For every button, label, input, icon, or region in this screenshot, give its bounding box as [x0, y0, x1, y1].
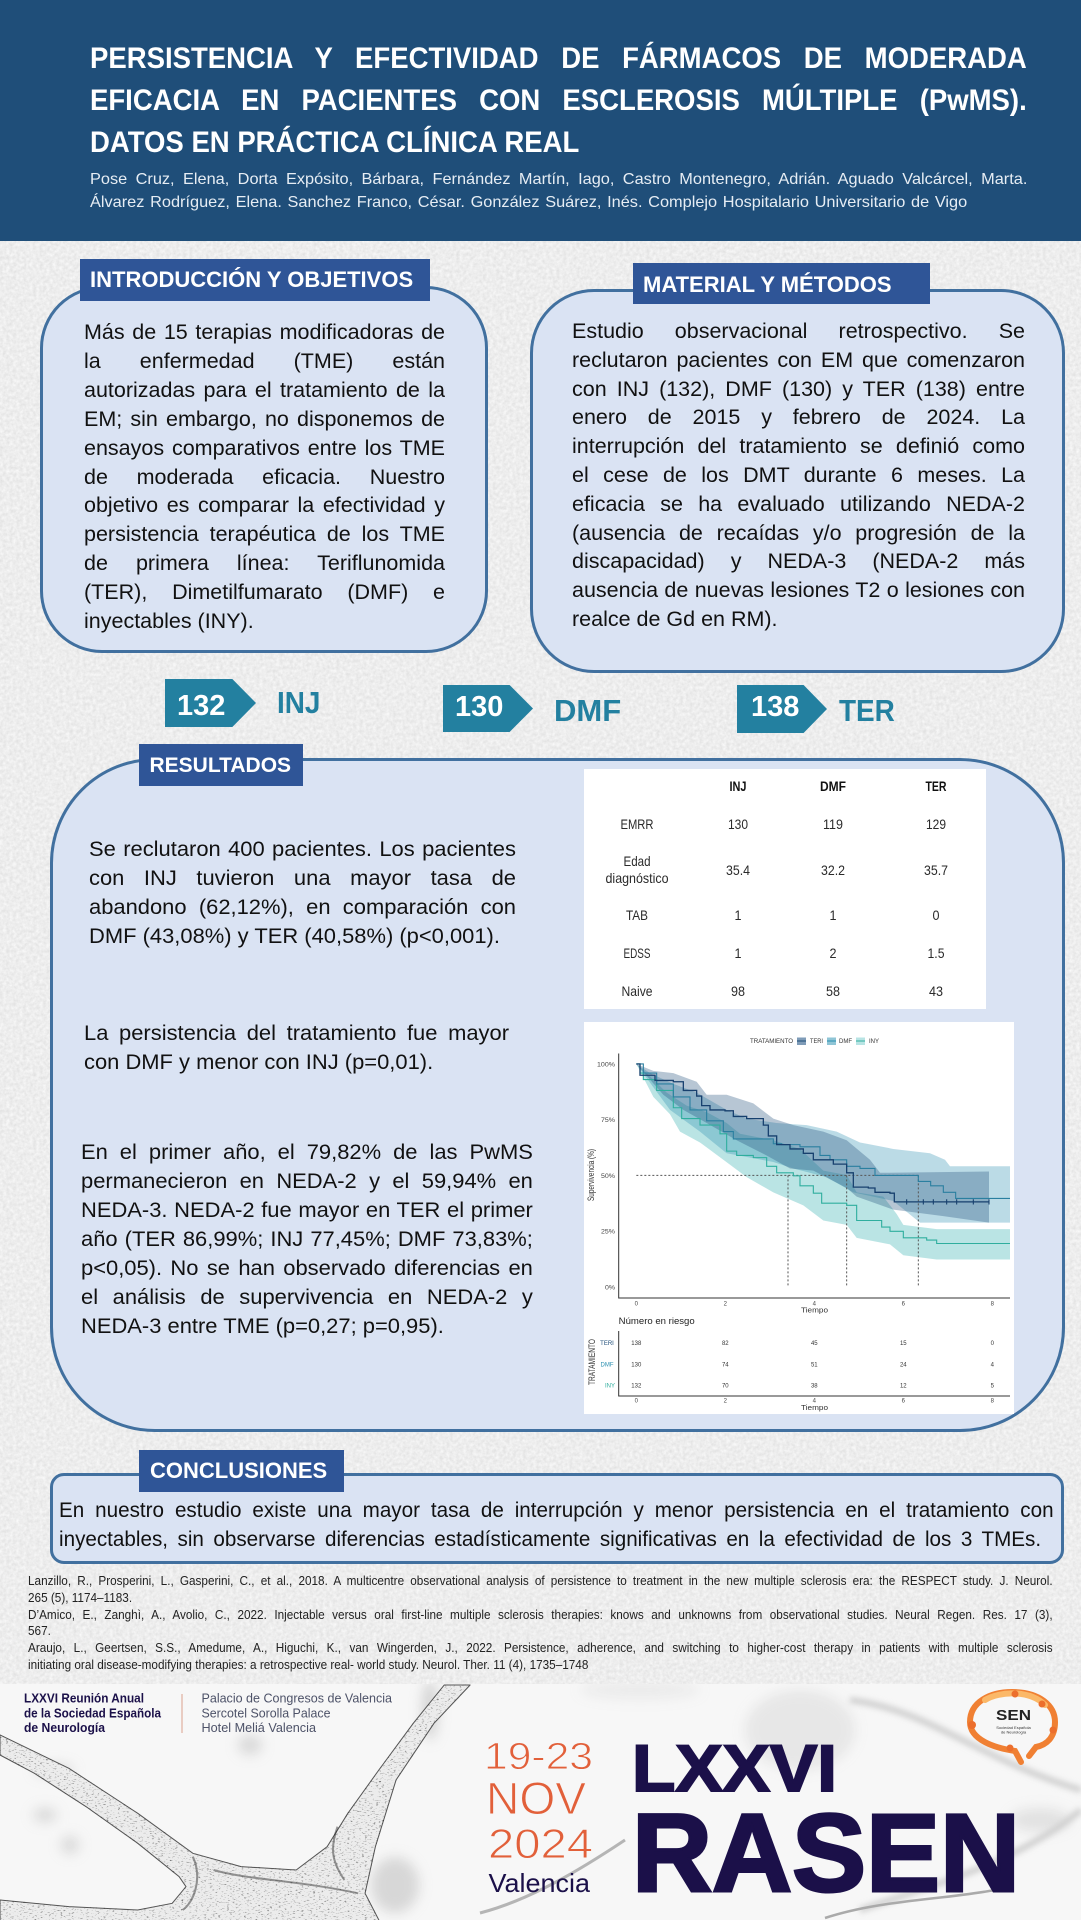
- text: introducción: (TER), Dimetilfumarato (DMF) e: [84, 580, 445, 604]
- table: características basales: 2: [830, 945, 837, 961]
- table: características basales: Naive: [622, 983, 653, 999]
- text: NEDA: p<0,05). No se han observado diferencias en: [81, 1256, 533, 1280]
- title: DATOS EN PRÁCTICA CLÍNICA REAL: [90, 126, 579, 159]
- table: características basales: EDSS: [624, 945, 650, 961]
- references: 265 (5), 1174–1183.: [28, 1591, 132, 1605]
- chart axis labels: 25%: [601, 1230, 616, 1236]
- chart: Kaplan-Meier survival: [584, 1022, 1014, 1414]
- chart axis labels: [597, 1062, 995, 1405]
- risk table: [600, 1316, 995, 1390]
- chart legend: DMF: [839, 1039, 852, 1045]
- table: características basales: 58: [826, 983, 840, 999]
- text: persistencia: La persistencia del tratamiento fue mayor: [84, 1021, 509, 1045]
- risk table: INY: [605, 1384, 615, 1390]
- risk table: TERI: [600, 1341, 614, 1347]
- text: abandono: Se reclutaron 400 pacientes. Los pacientes: [89, 836, 516, 860]
- chart: Kaplan-Meier survival: TRATAMIENTO: [587, 1339, 597, 1385]
- chart axis labels: 100%: [597, 1062, 616, 1068]
- panel: conclusiones: [50, 1450, 1064, 1564]
- title: [90, 42, 1027, 159]
- text: abandono: DMF (43,08%) y TER (40,58%) (p<0,001).: [89, 924, 500, 948]
- text: métodos: discapacidad) y NEDA-3 (NEDA-2 más: [572, 549, 1025, 573]
- heading: conclusiones: CONCLUSIONES: [150, 1458, 327, 1483]
- table: características basales: TER: [926, 778, 946, 794]
- text: persistencia: [84, 1021, 509, 1074]
- text: introducción: Más de 15 terapias modificadoras de: [84, 320, 445, 344]
- text: métodos: ausencia de nuevas lesiones T2 o lesiones con: [572, 578, 1025, 602]
- icon: SEN logo: Sociedad Española: [996, 1725, 1032, 1730]
- text: NEDA: año (TER 86,99%; INJ 77,45%; DMF 73,83%;: [81, 1226, 533, 1250]
- panel: introducción y objetivos: [40, 259, 488, 653]
- references: Lanzillo, R., Prosperini, L., Gasperini, C., et al., 2018. A multicentre observational analysis of persistence to treatment in the new multiple sclerosis era: the RESPECT study. J. Neurol.: [28, 1574, 1053, 1588]
- dates: [484, 1736, 593, 1898]
- references: D’Amico, E., Zanghì, A., Avolio, C., 2022. Injectable versus oral first-line multiple sclerosis therapies: knows and unknowns from observational studies. Neural Regen. Res. 17 (3),: [28, 1608, 1053, 1622]
- authors: Pose Cruz, Elena, Dorta Expósito, Bárbara, Fernández Martín, Iago, Castro Montenegro, Adrián. Aguado Valcárcel, Marta.: [90, 170, 1027, 188]
- survival curves: [636, 1064, 1010, 1287]
- table: características basales: 32.2: [821, 862, 845, 878]
- text: introducción: ensayos comparativos entre los TME: [84, 436, 445, 460]
- references: 567.: [28, 1624, 51, 1638]
- heading: conclusiones: [139, 1450, 344, 1492]
- dates: 19-23: [484, 1736, 593, 1778]
- text: métodos: reclutaron pacientes con EM que comenzaron: [572, 348, 1025, 372]
- table: características basales: 0: [932, 907, 940, 923]
- risk table: 15: [900, 1341, 907, 1347]
- table: características basales: DMF: [820, 778, 846, 794]
- text: métodos: eficacia se ha evaluado utilizando NEDA-2: [572, 492, 1025, 516]
- arrow: 138: [737, 685, 827, 733]
- title: EFICACIA EN PACIENTES CON ESCLEROSIS MÚLTIPLE (PwMS).: [90, 84, 1027, 117]
- chart legend: INY: [869, 1039, 879, 1045]
- text: introducción: la enfermedad (TME) están: [84, 349, 445, 373]
- table: características basales: diagnóstico: [606, 870, 669, 886]
- table: características basales: 98: [731, 983, 745, 999]
- heading: material y métodos: [633, 263, 930, 304]
- references: Araujo, L., Geertsen, S.S., Amedume, A., Higuchi, K., van Wingerden, J., 2022. Persistence, adherence, and switching to higher-cost therapy in patients with multiple sclerosis: [28, 1641, 1053, 1655]
- table: características basales: 130: [728, 816, 748, 832]
- text: abandono: [89, 836, 516, 948]
- congress name: RASEN: [632, 1792, 1020, 1915]
- dates: 2024: [488, 1820, 593, 1867]
- chart axis labels: 4: [813, 1399, 817, 1405]
- chart axis labels: 0: [635, 1399, 639, 1405]
- text: NEDA: [81, 1140, 533, 1338]
- arrow: 132: 132: [177, 690, 225, 722]
- risk table: 45: [811, 1341, 818, 1347]
- text: introducción: autorizadas para el tratamiento de la: [84, 378, 445, 402]
- congress name: LXXVI: [632, 1731, 837, 1805]
- risk table: 132: [631, 1384, 642, 1390]
- heading: resultados: [139, 744, 303, 786]
- panel: resultados: [50, 744, 1065, 1432]
- congress info: Sercotel Sorolla Palace: [202, 1706, 331, 1720]
- table: características basales: TAB: [626, 907, 648, 923]
- risk table: 38: [811, 1384, 818, 1390]
- chart axis labels: 2: [724, 1302, 728, 1308]
- text: NEDA: En el primer año, el 79,82% de las PwMS: [81, 1140, 533, 1164]
- chart axis labels: 6: [902, 1399, 906, 1405]
- table: características basales: 1: [830, 907, 837, 923]
- dates: Valencia: [488, 1868, 591, 1898]
- neuron: [0, 1685, 470, 1920]
- congress info: LXXVI Reunión Anual: [24, 1692, 144, 1706]
- text: introducción: persistencia terapéutica de los TME: [84, 522, 445, 546]
- risk table: 12: [900, 1384, 907, 1390]
- header banner: [0, 0, 1081, 241]
- heading: introducción y objetivos: INTRODUCCIÓN Y OBJETIVOS: [90, 267, 413, 292]
- table: características basales: 35.4: [726, 862, 750, 878]
- table: características basales: EMRR: [620, 816, 654, 832]
- text: métodos: Estudio observacional retrospectivo. Se: [572, 319, 1025, 343]
- chart: Kaplan-Meier survival: Tiempo: [801, 1403, 828, 1412]
- chart: Kaplan-Meier survival: Supervivencia (%): [586, 1149, 596, 1201]
- chart axis labels: 8: [991, 1399, 995, 1405]
- text: persistencia: con DMF y menor con INJ (p=0,01).: [84, 1050, 433, 1074]
- icon: SEN logo: de Neurología: [1001, 1730, 1027, 1734]
- table: características basales: 43: [929, 983, 943, 999]
- text: conclusiones: En nuestro estudio existe una mayor tasa de interrupción y menor persistencia en el tratamiento con: [59, 1498, 1053, 1522]
- label: DMF: DMF: [554, 693, 621, 728]
- table: características basales: Edad: [624, 853, 650, 869]
- label: INJ: INJ: [277, 685, 320, 720]
- text: abandono: con INJ tuvieron una mayor tasa de: [89, 866, 516, 890]
- chart axis labels: 75%: [601, 1118, 616, 1124]
- risk table: 130: [631, 1362, 642, 1368]
- text: introducción: objetivo es comparar la efectividad y: [84, 493, 445, 517]
- chart axis labels: 6: [902, 1302, 906, 1308]
- arrow: 132: [165, 679, 256, 727]
- risk table: 0: [991, 1341, 995, 1347]
- risk table: 82: [722, 1341, 729, 1347]
- table: características basales: 129: [926, 816, 946, 832]
- congress name: [632, 1731, 1020, 1915]
- risk table: 138: [631, 1341, 642, 1347]
- chart axis labels: 50%: [601, 1174, 616, 1180]
- text: NEDA: el análisis de supervivencia en NEDA-2 y: [81, 1284, 533, 1308]
- risk table: Número en riesgo: [619, 1316, 695, 1326]
- references: [28, 1574, 1053, 1672]
- chart axis labels: 2: [724, 1399, 728, 1405]
- risk table: 4: [991, 1362, 995, 1368]
- chart axis labels: 4: [813, 1302, 817, 1308]
- panel: material y métodos: [530, 263, 1065, 673]
- table: características basales: [584, 769, 986, 1009]
- text: introducción: de moderada eficacia. Nuestro: [84, 465, 445, 489]
- text: NEDA: NEDA-3 entre TME (p=0,27; p=0,95).: [81, 1314, 444, 1338]
- title: PERSISTENCIA Y EFECTIVIDAD DE FÁRMACOS DE MODERADA: [90, 42, 1027, 75]
- table: características basales: 1: [734, 945, 742, 961]
- table: características basales: INJ: [730, 778, 746, 794]
- text: introducción: de primera línea: Teriflunomida: [84, 551, 445, 575]
- risk table: 51: [811, 1362, 818, 1368]
- text: introducción: inyectables (INY).: [84, 609, 254, 633]
- arrow: 138: 138: [751, 691, 799, 723]
- text: abandono: abandono (62,12%), en comparación con: [89, 894, 516, 918]
- congress banner: [0, 1684, 1081, 1920]
- table: características basales: 1: [734, 907, 742, 923]
- faint axon lines: [480, 1840, 625, 1913]
- authors: Álvarez Rodríguez, Elena. Sanchez Franco, César. González Suárez, Inés. Complejo Hospitalario Universitario de Vigo: [90, 194, 967, 211]
- congress info: de la Sociedad Española: [24, 1706, 162, 1720]
- chart axis labels: 0: [635, 1302, 639, 1308]
- table: características basales: 119: [823, 816, 843, 832]
- arrow: 130: [443, 685, 533, 732]
- text: introducción: EM; sin embargo, no disponemos de: [84, 407, 445, 431]
- chart axis labels: 8: [991, 1302, 995, 1308]
- text: métodos: (ausencia de recaídas y/o progresión de la: [572, 521, 1025, 545]
- text: métodos: [572, 319, 1025, 631]
- arrow: 130: 130: [455, 691, 503, 723]
- text: métodos: realce de Gd en RM).: [572, 607, 778, 631]
- risk table: 24: [900, 1362, 907, 1368]
- text: métodos: enero de 2015 y febrero de 2024. La: [572, 405, 1025, 429]
- chart legend: TRATAMIENTO: [750, 1039, 793, 1045]
- text: introducción: [84, 320, 445, 633]
- congress info: de Neurología: [24, 1721, 106, 1735]
- chart axes: [619, 1054, 1010, 1396]
- risk table: 70: [722, 1384, 729, 1390]
- risk table: 5: [991, 1384, 995, 1390]
- text: conclusiones: inyectables, sin observarse diferencias estadísticamente significativas en la efectividad de los 3 TMEs.: [59, 1527, 1041, 1551]
- risk table: DMF: [600, 1362, 614, 1368]
- heading: introducción y objetivos: [80, 259, 430, 300]
- background blurred cells: [33, 1680, 1070, 1913]
- icon: SEN logo: [967, 1689, 1058, 1765]
- label: TER: TER: [839, 693, 895, 728]
- congress info: Hotel Meliá Valencia: [202, 1721, 316, 1735]
- chart axis labels: 0%: [605, 1286, 616, 1292]
- congress info: [24, 1692, 392, 1735]
- text: métodos: el cese de los DMT durante 6 meses. La: [572, 463, 1025, 487]
- table: características basales: 35.7: [924, 862, 948, 878]
- congress info: Palacio de Congresos de Valencia: [202, 1692, 392, 1706]
- chart: Kaplan-Meier survival: Tiempo: [801, 1305, 828, 1314]
- references: initiating oral disease-modifying therapies: a retrospective real- world study. Neurol. Ther. 11 (4), 1735–1748: [28, 1658, 588, 1672]
- text: métodos: con INJ (132), DMF (130) y TER (138) entre: [572, 377, 1025, 401]
- text: NEDA: permanecieron en NEDA-2 y el 59,94% en: [81, 1168, 533, 1192]
- heading: resultados: RESULTADOS: [150, 754, 291, 777]
- text: métodos: interrupción del tratamiento se definió como: [572, 434, 1025, 458]
- authors: [90, 170, 1027, 211]
- icon: SEN logo: SEN: [996, 1707, 1031, 1724]
- risk table: 74: [722, 1362, 729, 1368]
- chart legend: [750, 1038, 879, 1045]
- chart legend: TERI: [810, 1039, 823, 1045]
- heading: material y métodos: MATERIAL Y MÉTODOS: [643, 272, 892, 297]
- dates: NOV: [486, 1773, 586, 1824]
- text: conclusiones: [59, 1498, 1053, 1551]
- text: NEDA: NEDA-3. NEDA-2 fue mayor en TER el primer: [81, 1198, 533, 1222]
- table: características basales: 1.5: [928, 945, 945, 961]
